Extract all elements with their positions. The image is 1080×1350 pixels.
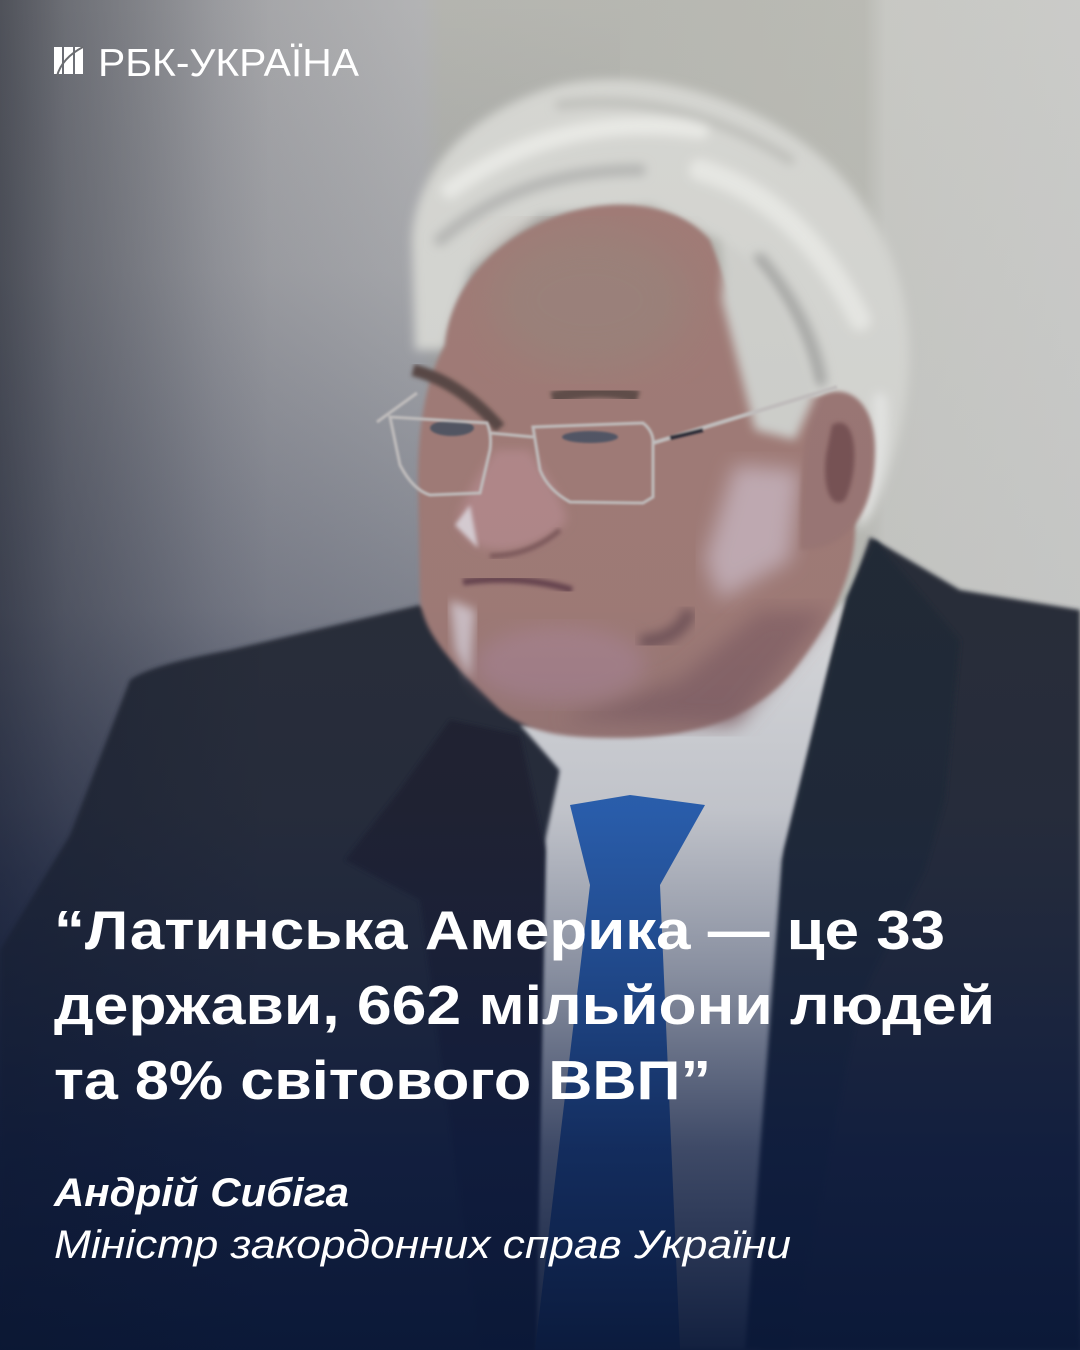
nose bbox=[458, 450, 567, 550]
quote bbox=[54, 899, 995, 1111]
logo wordmark: РБК-УКРАЇНА bbox=[98, 42, 359, 85]
eye left bbox=[430, 420, 474, 436]
hair bbox=[412, 79, 909, 532]
hair over temple bbox=[722, 245, 815, 440]
mouth bbox=[463, 579, 572, 590]
author: Андрій Сибіга bbox=[53, 1171, 349, 1215]
jaw shadow bbox=[640, 610, 690, 642]
shirt bbox=[520, 600, 845, 1350]
forehead shade bbox=[490, 230, 690, 370]
author bbox=[53, 1171, 791, 1267]
ear bbox=[800, 392, 875, 550]
quote: “Латинська Америка — це 33 bbox=[54, 899, 945, 961]
logo bbox=[54, 42, 359, 85]
eye right bbox=[562, 431, 618, 443]
hair texture bbox=[440, 102, 881, 510]
quote: та 8% світового ВВП” bbox=[54, 1049, 711, 1111]
logo mark bbox=[54, 47, 83, 76]
stubble highlight bbox=[450, 600, 475, 680]
neck lower shade bbox=[560, 610, 830, 725]
nose highlight bbox=[455, 505, 478, 548]
ear inner bbox=[825, 423, 854, 503]
eyebrow right bbox=[552, 391, 638, 398]
glasses bbox=[377, 387, 837, 503]
jacket bbox=[0, 537, 1080, 1350]
tie bbox=[535, 795, 705, 1350]
face bbox=[418, 205, 855, 738]
jacket lapel left bbox=[345, 720, 545, 1350]
jacket lapel right bbox=[745, 540, 960, 1350]
eyebrow left bbox=[413, 370, 500, 428]
nose shadow bbox=[490, 530, 560, 556]
author: Міністр закордонних справ України bbox=[54, 1223, 791, 1267]
chin bbox=[475, 627, 645, 703]
quote: держави, 662 мільйони людей bbox=[54, 974, 995, 1036]
cheek highlight bbox=[705, 465, 800, 600]
